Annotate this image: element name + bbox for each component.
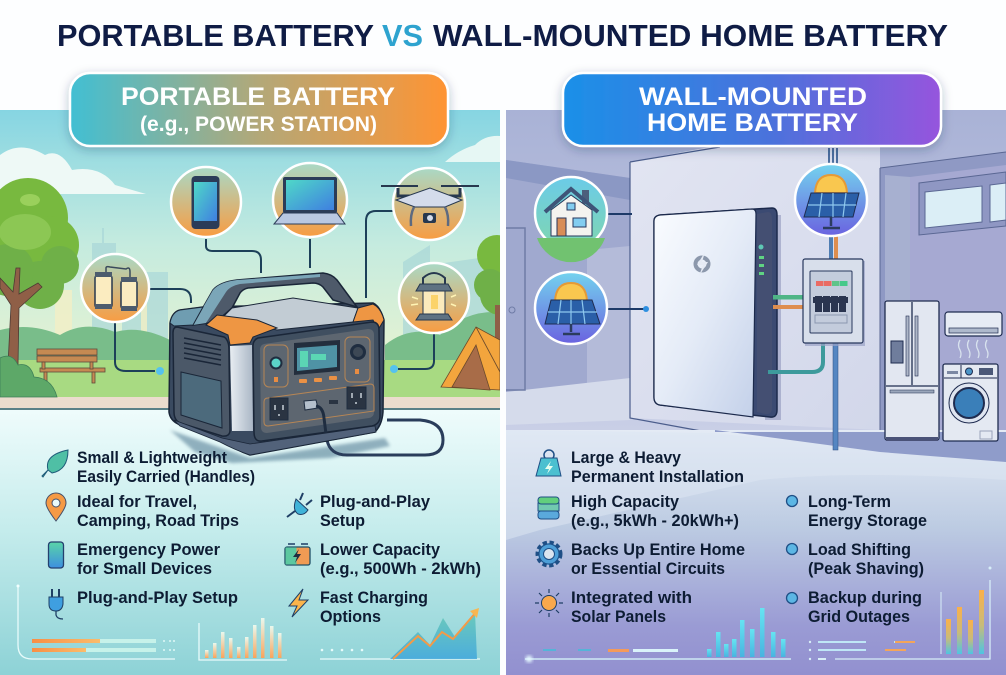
icon: sun xyxy=(535,589,563,617)
feature: lightweight: Easily Carried (Handles) xyxy=(77,467,255,486)
header: portable battery: (e.g., POWER STATION) xyxy=(140,113,377,136)
feature: lightweight xyxy=(77,448,255,486)
breaker panel xyxy=(803,259,865,346)
title: VS xyxy=(382,18,423,53)
feature: fast charging: Options xyxy=(320,607,381,626)
feature: backup: or Essential Circuits xyxy=(571,559,725,578)
bullet: long-term: Energy Storage xyxy=(808,511,927,530)
front panel xyxy=(253,322,380,442)
header: portable battery xyxy=(70,73,448,146)
icon: drone circle xyxy=(381,168,479,240)
feature: solar xyxy=(571,588,692,626)
tent xyxy=(441,327,500,390)
header: wall-mounted battery xyxy=(563,73,941,146)
bullet: load shifting: (Peak Shaving) xyxy=(808,559,924,578)
plug xyxy=(304,400,318,410)
shoulder left xyxy=(170,307,203,326)
icon: solar circle left xyxy=(535,272,607,344)
icon: database xyxy=(538,497,559,519)
bar chart: wall-mounted usage xyxy=(525,608,791,662)
icon: plug xyxy=(49,589,63,619)
tree right xyxy=(474,235,520,350)
feature list: portable xyxy=(42,448,481,626)
area chart: portable trend xyxy=(320,608,480,659)
feature: backup xyxy=(571,540,745,578)
feature: capacity: High Capacity xyxy=(571,492,680,511)
orange corner right xyxy=(353,304,384,330)
panel outlines xyxy=(264,337,374,426)
icon: house circle xyxy=(535,177,607,262)
power cable xyxy=(327,420,443,455)
bullet: outages: Backup during xyxy=(808,588,922,607)
solar to breaker wires xyxy=(829,235,838,261)
feature: capacity: Lower Capacity xyxy=(320,540,441,559)
feature: emergency: Emergency Power xyxy=(77,540,220,559)
display xyxy=(294,340,340,375)
bar chart: wall-mounted capacity xyxy=(809,566,992,660)
button and dial xyxy=(270,356,282,370)
washing machine xyxy=(943,364,998,441)
bullet: outages: Grid Outages xyxy=(808,607,910,626)
bullet: long-term xyxy=(786,492,927,530)
bullet: long-term: Long-Term xyxy=(808,492,891,511)
battery to breaker wires xyxy=(768,295,823,372)
feature: capacity: (e.g., 500Wh - 2kWh) xyxy=(320,559,481,578)
header: portable battery: PORTABLE BATTERY xyxy=(121,83,395,111)
outlets xyxy=(270,387,366,420)
icon: lantern circle xyxy=(399,263,469,333)
icon: laptop circle xyxy=(273,163,347,237)
logo xyxy=(696,252,708,276)
icon: plug angled xyxy=(287,493,312,517)
bullet: outages xyxy=(786,588,922,626)
indicator lights xyxy=(299,376,337,383)
house connector line xyxy=(608,213,632,215)
feature: solar: Integrated with xyxy=(571,588,692,607)
window xyxy=(919,172,1006,235)
garage scene background xyxy=(506,110,1006,460)
lower panel background xyxy=(0,410,500,675)
status lights xyxy=(758,244,764,275)
feature: large xyxy=(571,448,744,486)
feature: setup: Setup xyxy=(320,511,365,530)
title: PORTABLE BATTERY xyxy=(57,18,374,53)
feature: travel: Ideal for Travel, xyxy=(77,492,197,511)
feature: large: Large & Heavy xyxy=(571,448,681,467)
feature list: wall-mounted xyxy=(535,448,927,626)
feature: emergency xyxy=(77,540,220,578)
orange corner left xyxy=(206,315,277,345)
tree left xyxy=(0,178,79,365)
air conditioner xyxy=(945,312,1002,358)
body silhouette xyxy=(169,303,384,455)
feature: lightweight: Small & Lightweight xyxy=(77,448,227,467)
icon: location pin xyxy=(46,493,66,521)
feature: solar: Solar Panels xyxy=(571,607,666,626)
decorative chart: progress bars xyxy=(16,584,175,659)
wall battery xyxy=(654,208,781,420)
icon: solar circle top xyxy=(795,164,867,236)
title xyxy=(57,18,948,53)
lower panel background xyxy=(506,430,1006,675)
feature: capacity xyxy=(320,540,481,578)
feature: fast charging: Fast Charging xyxy=(320,588,428,607)
icon: weight xyxy=(536,450,561,476)
title: WALL-MOUNTED HOME BATTERY xyxy=(433,18,948,53)
conduit up xyxy=(829,148,837,170)
feature: backup: Backs Up Entire Home xyxy=(571,540,745,559)
top lid xyxy=(223,298,358,330)
header: wall-mounted battery: HOME BATTERY xyxy=(647,109,858,137)
icon: feather xyxy=(42,450,68,477)
icon: phone xyxy=(48,542,64,568)
handle xyxy=(193,273,357,325)
feet xyxy=(174,420,376,455)
connector lines xyxy=(115,211,434,371)
icon: gear xyxy=(538,543,560,565)
battery shadow xyxy=(170,430,390,463)
feature: capacity: (e.g., 5kWh - 20kWh+) xyxy=(571,511,739,530)
feature: fast charging xyxy=(320,588,428,626)
icon: lightning xyxy=(289,589,308,617)
solar connector line xyxy=(608,306,649,312)
feature: plug and play: Plug-and-Play Setup xyxy=(77,588,238,607)
icon: cells circle xyxy=(81,254,149,322)
connector node dots xyxy=(156,365,398,375)
bullet: load shifting: Load Shifting xyxy=(808,540,911,559)
divider strip xyxy=(500,110,506,675)
panel: wall-mounted home battery xyxy=(506,110,1006,675)
portable power station xyxy=(169,273,443,455)
feature: emergency: for Small Devices xyxy=(77,559,212,578)
icon: battery xyxy=(285,544,310,565)
bar chart: portable usage xyxy=(199,618,287,660)
header: wall-mounted battery: WALL-MOUNTED xyxy=(639,83,867,111)
bullet: load shifting xyxy=(786,540,924,578)
feature: large: Permanent Installation xyxy=(571,467,744,486)
fridge xyxy=(885,301,939,441)
park scene background xyxy=(0,110,500,410)
feature: travel xyxy=(77,492,239,530)
conduit down xyxy=(833,340,838,450)
feature: capacity xyxy=(571,492,739,530)
bench xyxy=(37,349,105,383)
side panel with vents xyxy=(173,327,230,436)
feature: travel: Camping, Road Trips xyxy=(77,511,239,530)
bush xyxy=(0,356,57,397)
steel side xyxy=(230,345,253,431)
feature: setup: Plug-and-Play xyxy=(320,492,431,511)
icon: phone circle xyxy=(171,167,241,237)
feature: setup xyxy=(320,492,431,530)
